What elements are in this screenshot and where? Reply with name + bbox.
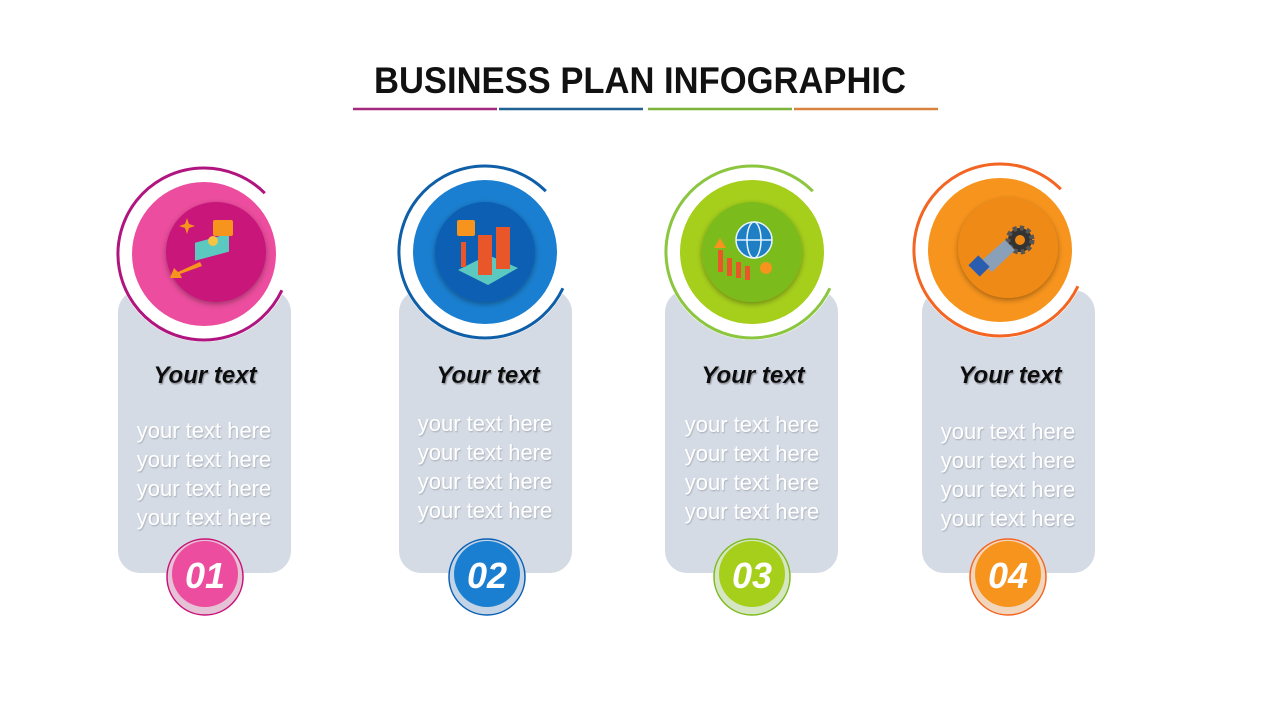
body text 04: your text here bbox=[941, 477, 1075, 502]
ring arc 03 bbox=[666, 166, 830, 338]
icon circle 01 bbox=[132, 182, 276, 326]
body text 01 bbox=[137, 418, 271, 530]
body text 01: your text here bbox=[137, 505, 271, 530]
badge 04: 04 bbox=[988, 555, 1028, 596]
icon: hand gear bbox=[968, 228, 1032, 277]
badge 02: 02 bbox=[467, 555, 507, 596]
badge 03 bbox=[714, 539, 790, 615]
body text 04: your text here bbox=[941, 419, 1075, 444]
icon circle 03 bbox=[680, 180, 824, 324]
body text 02 bbox=[418, 411, 552, 523]
body text 01: your text here bbox=[137, 418, 271, 443]
body text 02: your text here bbox=[418, 469, 552, 494]
body text 04: your text here bbox=[941, 448, 1075, 473]
body text 01: your text here bbox=[137, 447, 271, 472]
body text 02: your text here bbox=[418, 498, 552, 523]
panel: step 04 bbox=[912, 162, 1095, 615]
body text 03: your text here bbox=[685, 499, 819, 524]
ring arc 01 bbox=[118, 168, 282, 340]
panel: step 03 bbox=[664, 164, 840, 615]
icon circle 02 bbox=[413, 180, 557, 324]
panel: step 02 bbox=[397, 164, 573, 615]
body text 03: your text here bbox=[685, 441, 819, 466]
title underline bbox=[353, 108, 938, 110]
body text 04: your text here bbox=[941, 506, 1075, 531]
heading 04: Your text bbox=[958, 362, 1063, 389]
badge 02 bbox=[449, 539, 525, 615]
card 01 bbox=[118, 290, 291, 573]
ring arc 02 bbox=[399, 166, 563, 338]
body text 02: your text here bbox=[418, 440, 552, 465]
badge 03: 03 bbox=[732, 555, 772, 596]
title: BUSINESS PLAN INFOGRAPHIC bbox=[374, 60, 906, 101]
heading 03: Your text bbox=[701, 362, 806, 389]
panel: step 01 bbox=[116, 166, 292, 615]
icon: money bbox=[170, 218, 233, 278]
body text 01: your text here bbox=[137, 476, 271, 501]
icon: globe chart bbox=[714, 222, 772, 280]
body text 03 bbox=[685, 412, 819, 524]
card 03 bbox=[665, 290, 838, 573]
body text 04 bbox=[941, 419, 1075, 531]
heading 01: Your text bbox=[153, 362, 258, 389]
icon: buildings bbox=[457, 220, 518, 285]
badge 04 bbox=[970, 539, 1046, 615]
ring arc 04 bbox=[914, 164, 1078, 336]
heading 02: Your text bbox=[436, 362, 541, 389]
body text 03: your text here bbox=[685, 412, 819, 437]
card 02 bbox=[399, 290, 572, 573]
body text 02: your text here bbox=[418, 411, 552, 436]
icon circle 04 bbox=[928, 178, 1072, 322]
badge 01: 01 bbox=[185, 555, 225, 596]
badge 01 bbox=[167, 539, 243, 615]
body text 03: your text here bbox=[685, 470, 819, 495]
card 04 bbox=[922, 290, 1095, 573]
